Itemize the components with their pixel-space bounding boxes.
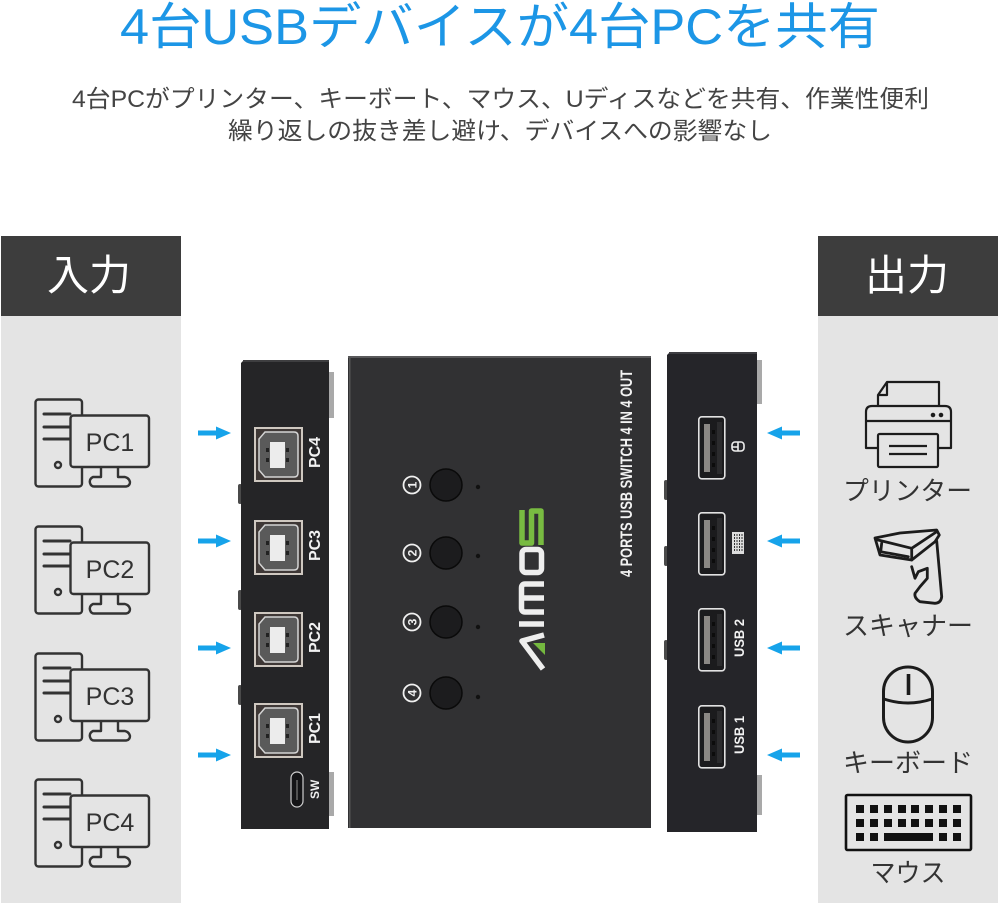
port: USB 2 <box>699 609 725 671</box>
icon: PC3: PC3 <box>86 683 134 711</box>
arrows: input <box>198 426 231 762</box>
description text <box>72 86 929 145</box>
logo: AIMOS <box>519 510 545 669</box>
port: SW <box>291 772 322 807</box>
buttons <box>430 469 480 709</box>
icon: printer <box>866 382 951 467</box>
icon: scanner <box>875 530 942 603</box>
port: PC3: PC3 <box>307 530 324 561</box>
arrows: output <box>767 426 800 762</box>
panel: input <box>1 236 181 903</box>
heading: output <box>818 236 998 316</box>
heading: input <box>1 236 181 316</box>
port: PC2 <box>254 612 324 667</box>
icon: PC4 <box>36 780 149 866</box>
description text: 繰り返しの抜き差し避け、デバイスへの影響なし <box>228 118 772 145</box>
button numbers: 2 <box>406 549 420 556</box>
icon: PC1: PC1 <box>86 429 134 457</box>
device: top view <box>348 356 651 828</box>
description text: 4台PCがプリンター、キーボート、マウス、Uディスなどを共有、作業性便利 <box>72 86 929 113</box>
port: PC4 <box>254 427 324 482</box>
label: USB 2: USB 2 <box>731 619 747 657</box>
port: PC1 <box>254 703 324 758</box>
label: mouse: マウス <box>870 858 946 888</box>
label: printer: プリンター <box>843 476 972 506</box>
icon: PC3 <box>36 654 149 740</box>
port icon: keyboard <box>732 532 744 554</box>
button numbers: 1 <box>406 481 420 488</box>
heading: output: 出力 <box>865 252 949 299</box>
icon: PC2 <box>36 526 149 614</box>
panel: output <box>818 236 998 903</box>
port: USB 1 <box>699 706 725 768</box>
icon: PC1 <box>36 400 149 486</box>
label: keyboard: キーボード <box>843 748 973 778</box>
port: PC4: PC4 <box>307 437 324 468</box>
button numbers: 3 <box>406 618 420 625</box>
port: SW: SW <box>308 779 322 799</box>
icon: PC2: PC2 <box>86 556 134 584</box>
port: PC1: PC1 <box>307 713 324 744</box>
port: PC3 <box>254 520 324 575</box>
title: 4台USBデバイスが4台PCを共有 <box>120 0 880 55</box>
button numbers <box>404 476 420 702</box>
icon: PC4: PC4 <box>86 809 134 837</box>
port: keyboard <box>699 513 725 575</box>
label: USB 1: USB 1 <box>731 716 747 754</box>
device: output side <box>664 352 762 832</box>
port: PC2: PC2 <box>307 622 324 653</box>
port icon: mouse <box>732 442 744 451</box>
icon: keyboard <box>846 795 971 850</box>
button numbers: 4 <box>406 689 420 696</box>
port: mouse <box>699 417 725 479</box>
icon: mouse <box>884 667 932 742</box>
label: scanner: スキャナー <box>843 611 973 641</box>
heading: input: 入力 <box>47 252 131 299</box>
device: input side <box>238 360 334 829</box>
model text: 4 PORTS USB SWITCH 4 IN 4 OUT <box>617 370 636 577</box>
